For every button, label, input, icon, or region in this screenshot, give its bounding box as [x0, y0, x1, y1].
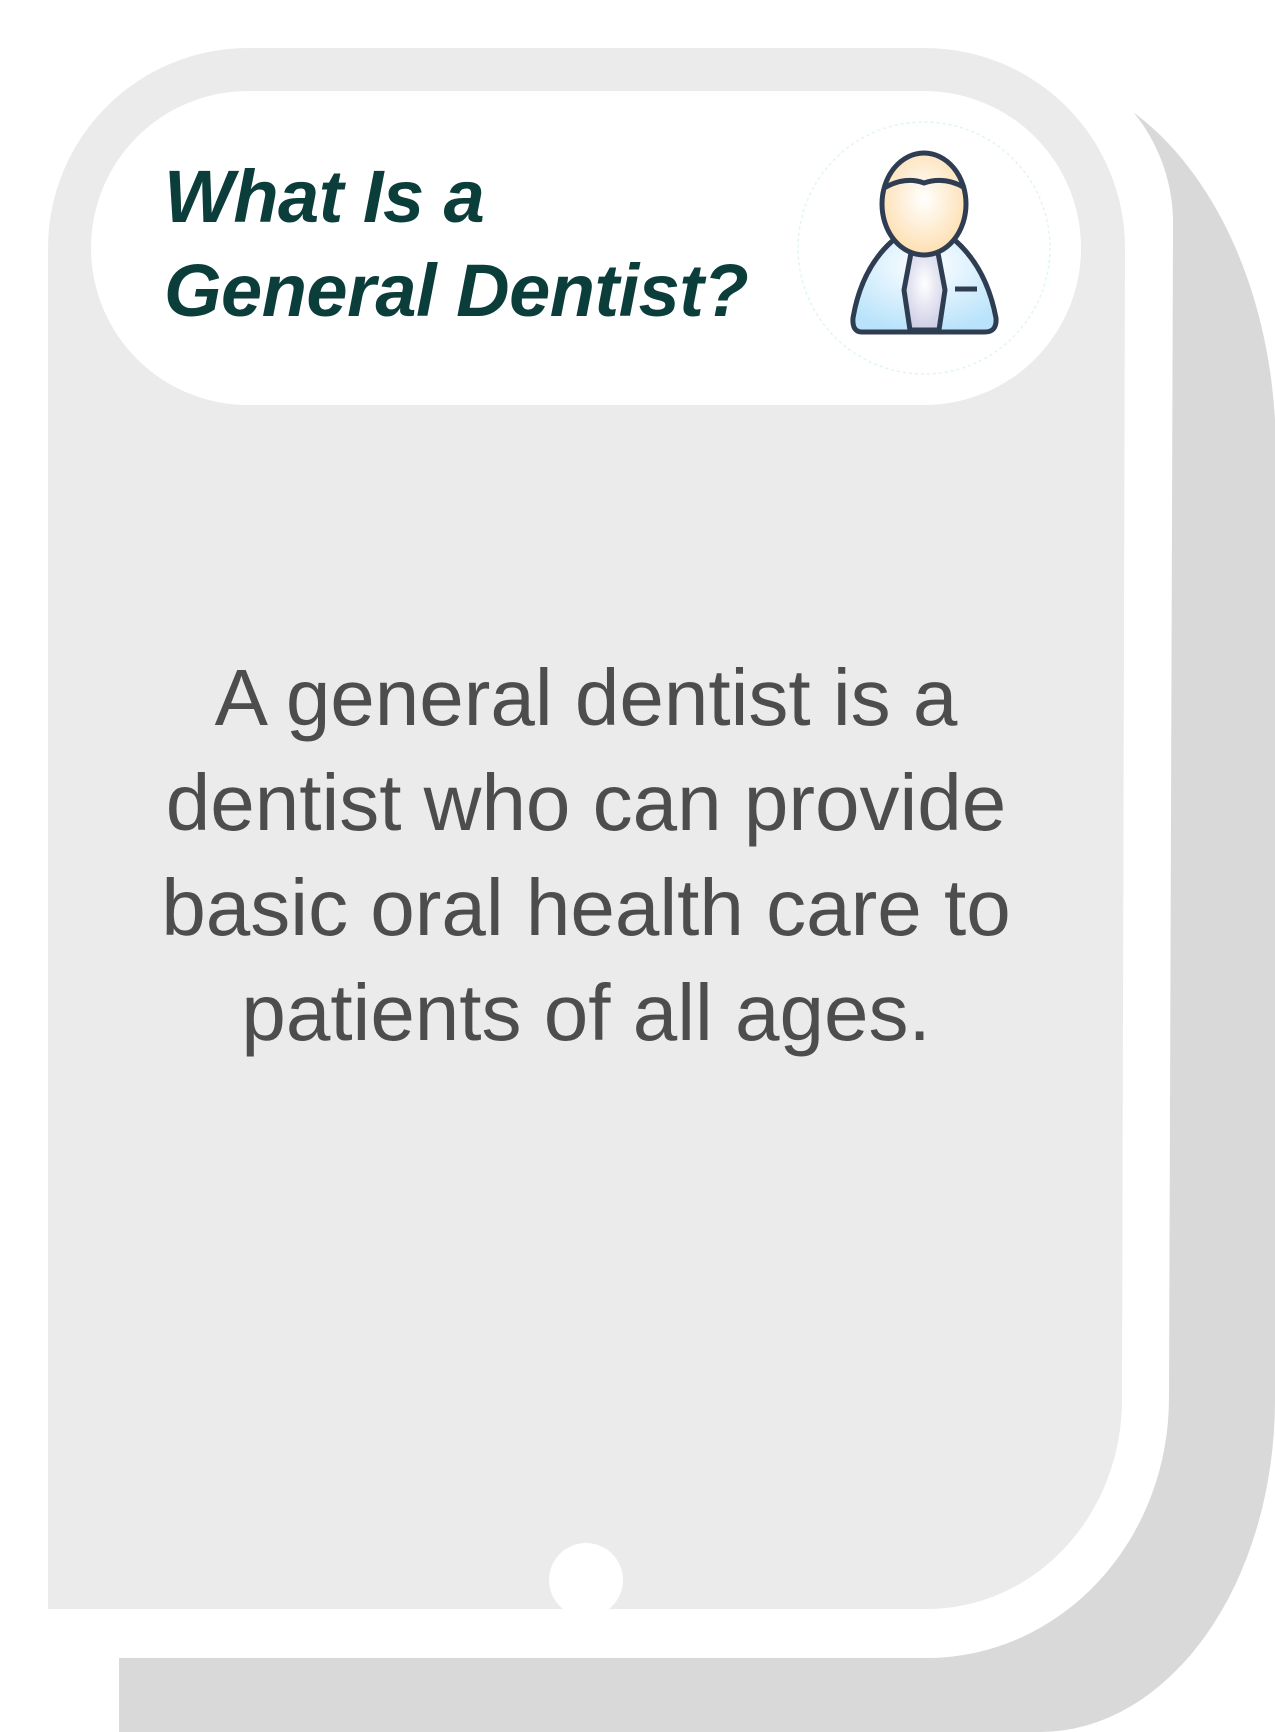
body text: A general dentist is a — [215, 653, 957, 742]
header pill — [91, 91, 1081, 405]
body text: patients of all ages. — [241, 968, 931, 1057]
body text: basic oral health care to — [161, 863, 1011, 952]
body text — [161, 653, 1011, 1057]
body text: dentist who can provide — [166, 758, 1006, 847]
title: General Dentist? — [164, 249, 748, 332]
icon circle — [798, 122, 1050, 374]
main panel — [48, 48, 1125, 1609]
bottom hole — [549, 1543, 623, 1617]
title — [164, 155, 748, 332]
title: What Is a — [164, 155, 484, 238]
